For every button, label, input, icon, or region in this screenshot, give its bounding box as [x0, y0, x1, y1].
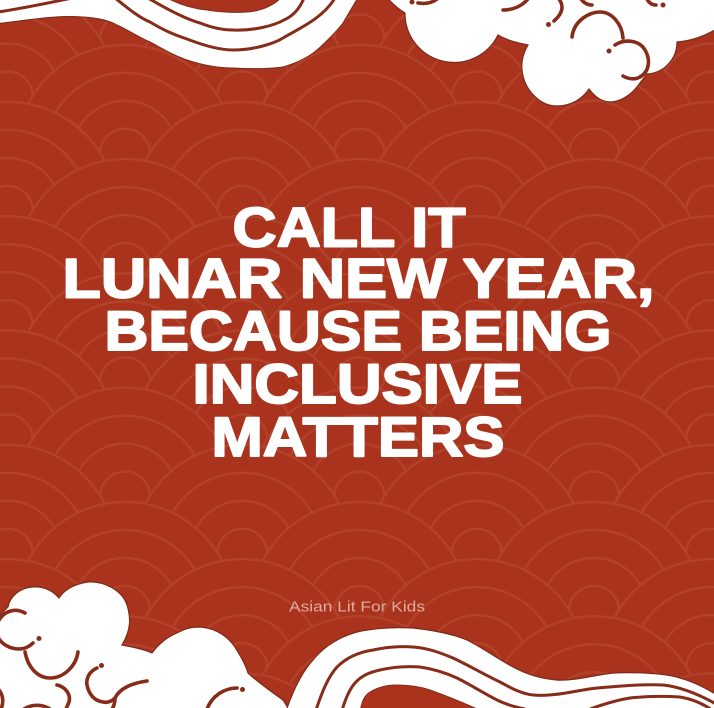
top right cloud	[384, 0, 714, 106]
main title: LUNAR NEW YEAR,	[62, 246, 654, 310]
top wave ribbon	[0, 0, 360, 69]
bottom right wave ribbon	[285, 628, 714, 708]
main title: INCLUSIVE	[192, 352, 522, 415]
main title	[62, 196, 654, 468]
main title: BECAUSE BEING	[104, 299, 612, 362]
bottom left cloud	[0, 582, 292, 708]
main title: CALL IT	[232, 196, 466, 258]
main title: MATTERS	[212, 405, 504, 468]
inner red gap of ribbon	[360, 685, 484, 708]
attribution: Asian Lit For Kids	[289, 598, 425, 616]
